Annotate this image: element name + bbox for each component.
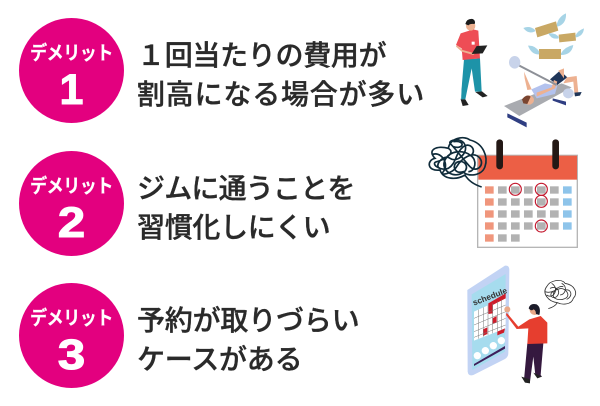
text: demerit 3 — [137, 305, 359, 375]
smartphone schedule: schedule — [471, 285, 509, 308]
badge: デメリット 3: 3 — [58, 331, 85, 379]
person — [504, 304, 547, 383]
badge: デメリット 3: デメリット — [30, 308, 113, 329]
text: demerit 3: ケースがある — [137, 344, 302, 375]
badge: デメリット 3 — [19, 283, 124, 388]
text: demerit 2 — [137, 173, 355, 243]
trainer — [456, 19, 488, 106]
calendar — [478, 139, 577, 247]
tangled scribble — [429, 138, 486, 187]
badge: デメリット 1: デメリット — [30, 43, 113, 64]
bench press — [504, 56, 582, 127]
badge: デメリット 2 — [19, 151, 124, 256]
money with wings — [523, 13, 584, 59]
badge: デメリット 1 — [19, 18, 124, 123]
icon: trainer, flying money and bench press — [456, 13, 584, 127]
badge: デメリット 2: 2 — [58, 199, 85, 247]
text: demerit 1 — [137, 40, 425, 110]
badge: デメリット 1: 1 — [60, 66, 83, 114]
text: demerit 3: 予約が取りづらい — [137, 305, 359, 336]
text: demerit 1: １回当たりの費用が — [137, 40, 386, 71]
text: demerit 2: 習慣化しにくい — [137, 212, 330, 243]
text: demerit 2: ジムに通うことを — [137, 173, 355, 204]
scribble — [545, 280, 576, 309]
text: demerit 1: 割高になる場合が多い — [137, 79, 425, 110]
icon: calendar with tangled scribble — [429, 138, 577, 247]
icon: person at smartphone schedule with scribble — [467, 266, 576, 383]
badge: デメリット 2: デメリット — [30, 176, 113, 197]
